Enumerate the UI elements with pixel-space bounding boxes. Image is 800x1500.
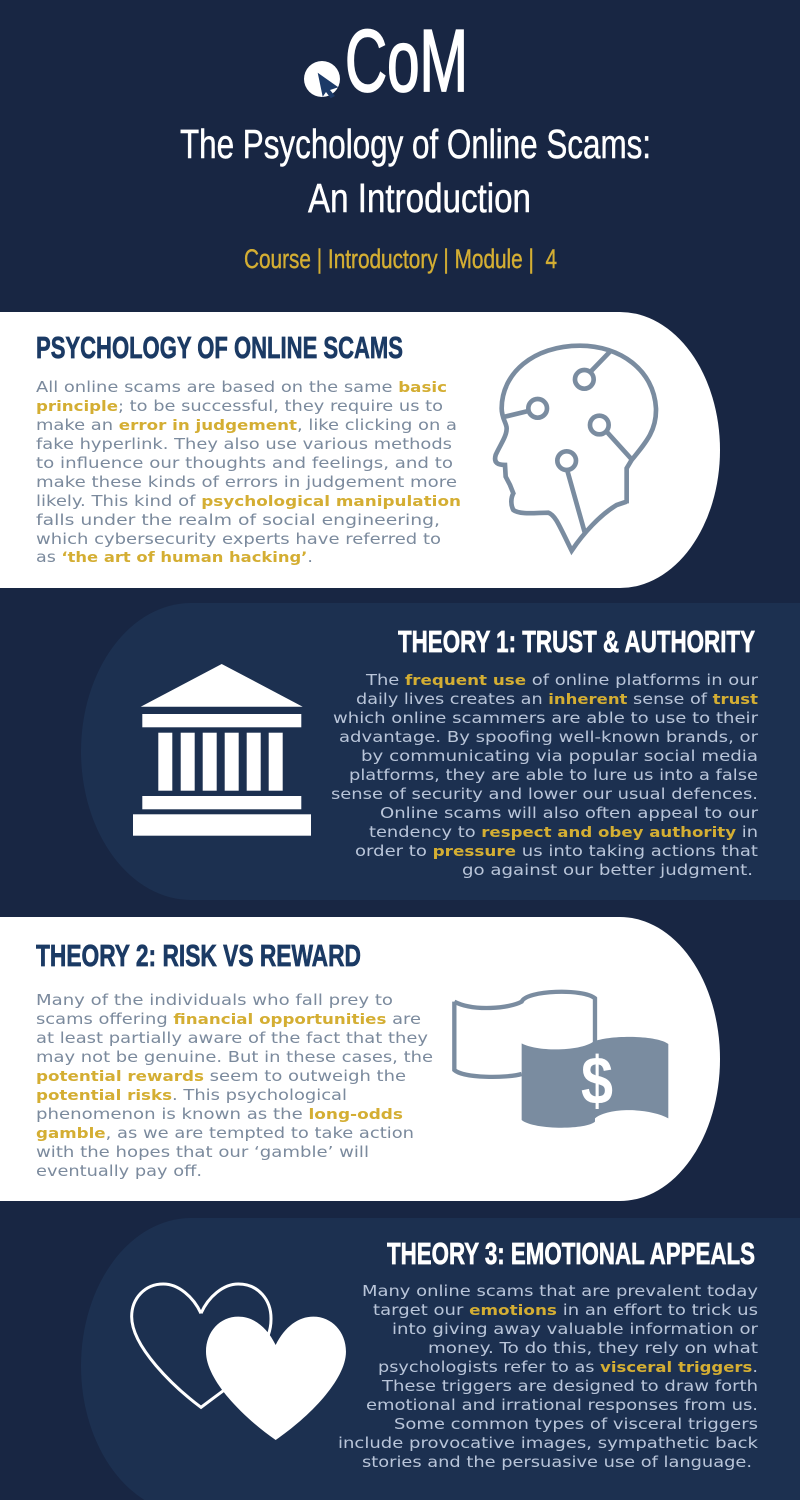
text block: make these kinds of errors in judgement more [36,473,457,491]
heading: PSYCHOLOGY OF ONLINE SCAMS [36,330,403,365]
text block: emotional and irrational responses from us. [366,1396,758,1414]
text block: Many of the individuals who fall prey to [36,991,393,1009]
panel: psychology of online scams [0,312,720,588]
text block: likely. This kind of psychological manipulation [36,492,461,510]
text block: order to pressure us into taking actions that [355,842,758,860]
text block [36,991,433,1180]
icon: head with circuit nodes [495,346,656,551]
text block [331,671,759,879]
text block: Some common types of visceral triggers [394,1415,758,1433]
text block: by communicating via popular social media [361,747,758,765]
text block: psychologists refer to as visceral triggers . [378,1358,758,1376]
text block: platforms, they are able to lure us into a false [349,766,758,784]
text block: scams offering financial opportunities are [36,1010,421,1028]
text block: may not be genuine. But in these cases, the [36,1048,433,1066]
text block: eventually pay off. [36,1162,202,1180]
title: An Introduction [308,175,531,221]
text block: advantage. By spoofing well-known brands, or [339,728,759,746]
logo: CoM [345,11,468,110]
text block [338,1282,759,1471]
text block: These triggers are designed to draw forth [381,1377,758,1395]
icon: classical building [133,664,311,836]
panel: theory 1 [81,603,800,900]
text block: Many online scams that are prevalent today [362,1282,758,1300]
subtitle: Course | Introductory | Module | 4 [244,244,557,274]
icon: banknotes with dollar sign [454,992,668,1128]
heading: THEORY 2: RISK VS REWARD [36,938,361,973]
text block: daily lives creates an inherent sense of trust [356,690,758,708]
text block: go against our better judgment. [462,861,753,879]
text block: which online scammers are able to use to their [333,709,759,727]
text block: to influence our thoughts and feelings, and to [36,454,453,472]
text block: with the hopes that our ‘gamble’ will [36,1143,369,1161]
text block: All online scams are based on the same basic [36,378,447,396]
text block: potential rewards seem to outweigh the [36,1067,406,1085]
text block: money. To do this, they rely on what [428,1339,758,1357]
text block: which cybersecurity experts have referred to [36,530,441,548]
text block: falls under the realm of social engineering, [36,511,440,529]
text block: fake hyperlink. They also use various methods [36,435,452,453]
title: The Psychology of Online Scams: [180,121,651,167]
text block: tendency to respect and obey authority in [369,823,758,841]
logo [304,11,468,110]
icon: banknotes with dollar sign: $ [581,1043,613,1119]
text block: make an error in judgement , like clicking on a [36,416,457,434]
text block: gamble , as we are tempted to take action [36,1124,414,1142]
text block: The frequent use of online platforms in our [365,671,759,689]
text block: phenomenon is known as the long-odds [36,1105,403,1123]
text block: target our emotions in an effort to trick us [373,1301,758,1319]
panel: theory 3 [81,1218,800,1500]
text block: at least partially aware of the fact that they [36,1029,428,1047]
text block: potential risks . This psychological [36,1086,347,1104]
text block: principle ; to be successful, they require us to [36,397,443,415]
panel: theory 2 [0,917,720,1201]
text block: stories and the persuasive use of language. [362,1453,752,1471]
text block: as ‘the art of human hacking’ . [36,548,313,566]
icon: two hearts [132,1284,346,1440]
text block: into giving away valuable information or [392,1320,759,1338]
title [180,121,651,221]
text block: include provocative images, sympathetic back [338,1434,758,1452]
text block: sense of security and lower our usual defences. [331,785,758,803]
text block: Online scams will also often appeal to our [380,804,759,822]
text block [36,378,461,566]
